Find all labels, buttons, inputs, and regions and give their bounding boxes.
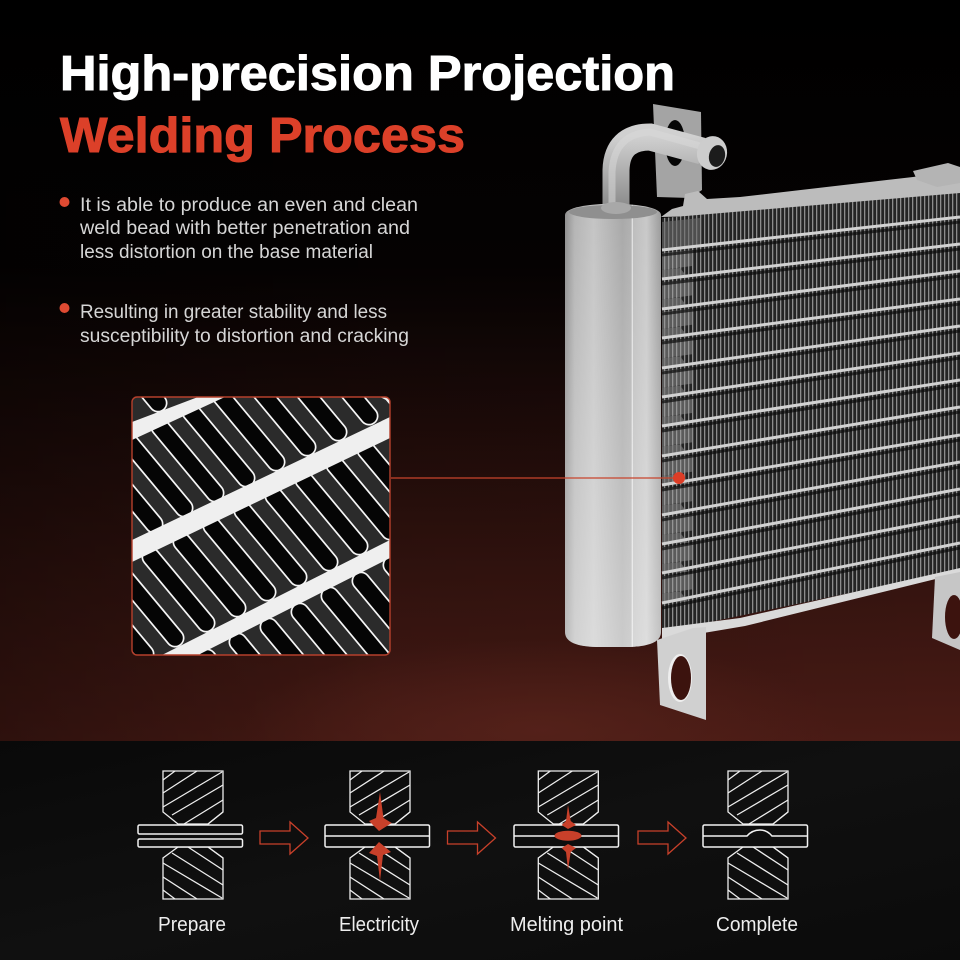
zoom callout line: [391, 477, 679, 479]
arrow: electricity to melting point: [448, 822, 496, 854]
step: prepare: Prepare: [158, 914, 226, 936]
fin row 2: [132, 446, 390, 654]
step: electricity: Electricity: [339, 914, 419, 936]
top plate: [661, 163, 960, 217]
side tank cylinder: [565, 202, 661, 647]
step: complete: [703, 771, 808, 936]
arrow: melting point to complete: [638, 822, 686, 854]
title: [60, 47, 675, 163]
step: melting point: [510, 771, 623, 936]
step: prepare: [138, 771, 242, 936]
bottom left bracket: [657, 627, 706, 720]
bullet: weld bead: less distortion on the base material: [80, 242, 373, 263]
fin row 1: [132, 398, 390, 532]
step: electricity: [325, 771, 430, 936]
step: complete: Complete: [716, 914, 798, 936]
arrow: prepare to electricity: [260, 822, 308, 854]
fin core: [662, 193, 960, 640]
fin row 3: [199, 558, 390, 654]
bullet: weld bead: [60, 195, 418, 263]
inlet pipe: [612, 132, 730, 208]
bottom band: [0, 741, 960, 960]
bullet: stability: [60, 302, 409, 347]
bullet: weld bead: It is able to produce an even and clean: [80, 195, 418, 216]
white tube bars: [132, 397, 390, 655]
fin row 0: [141, 398, 168, 412]
top mounting bracket: [653, 104, 702, 198]
bullet: weld bead: weld bead with better penetration and: [79, 218, 410, 239]
title: Welding Process: [60, 109, 465, 163]
bullet: stability: susceptibility to distortion and cracking: [80, 326, 409, 347]
radiator product: [565, 104, 960, 720]
bullet: stability: Resulting in greater stability and less: [80, 302, 387, 323]
step: melting point: Melting point: [510, 914, 623, 936]
bottom right bracket: [932, 572, 960, 650]
inset: fin close-up: [131, 396, 391, 656]
title: High-precision Projection: [60, 47, 675, 101]
callout dot: [673, 472, 685, 484]
